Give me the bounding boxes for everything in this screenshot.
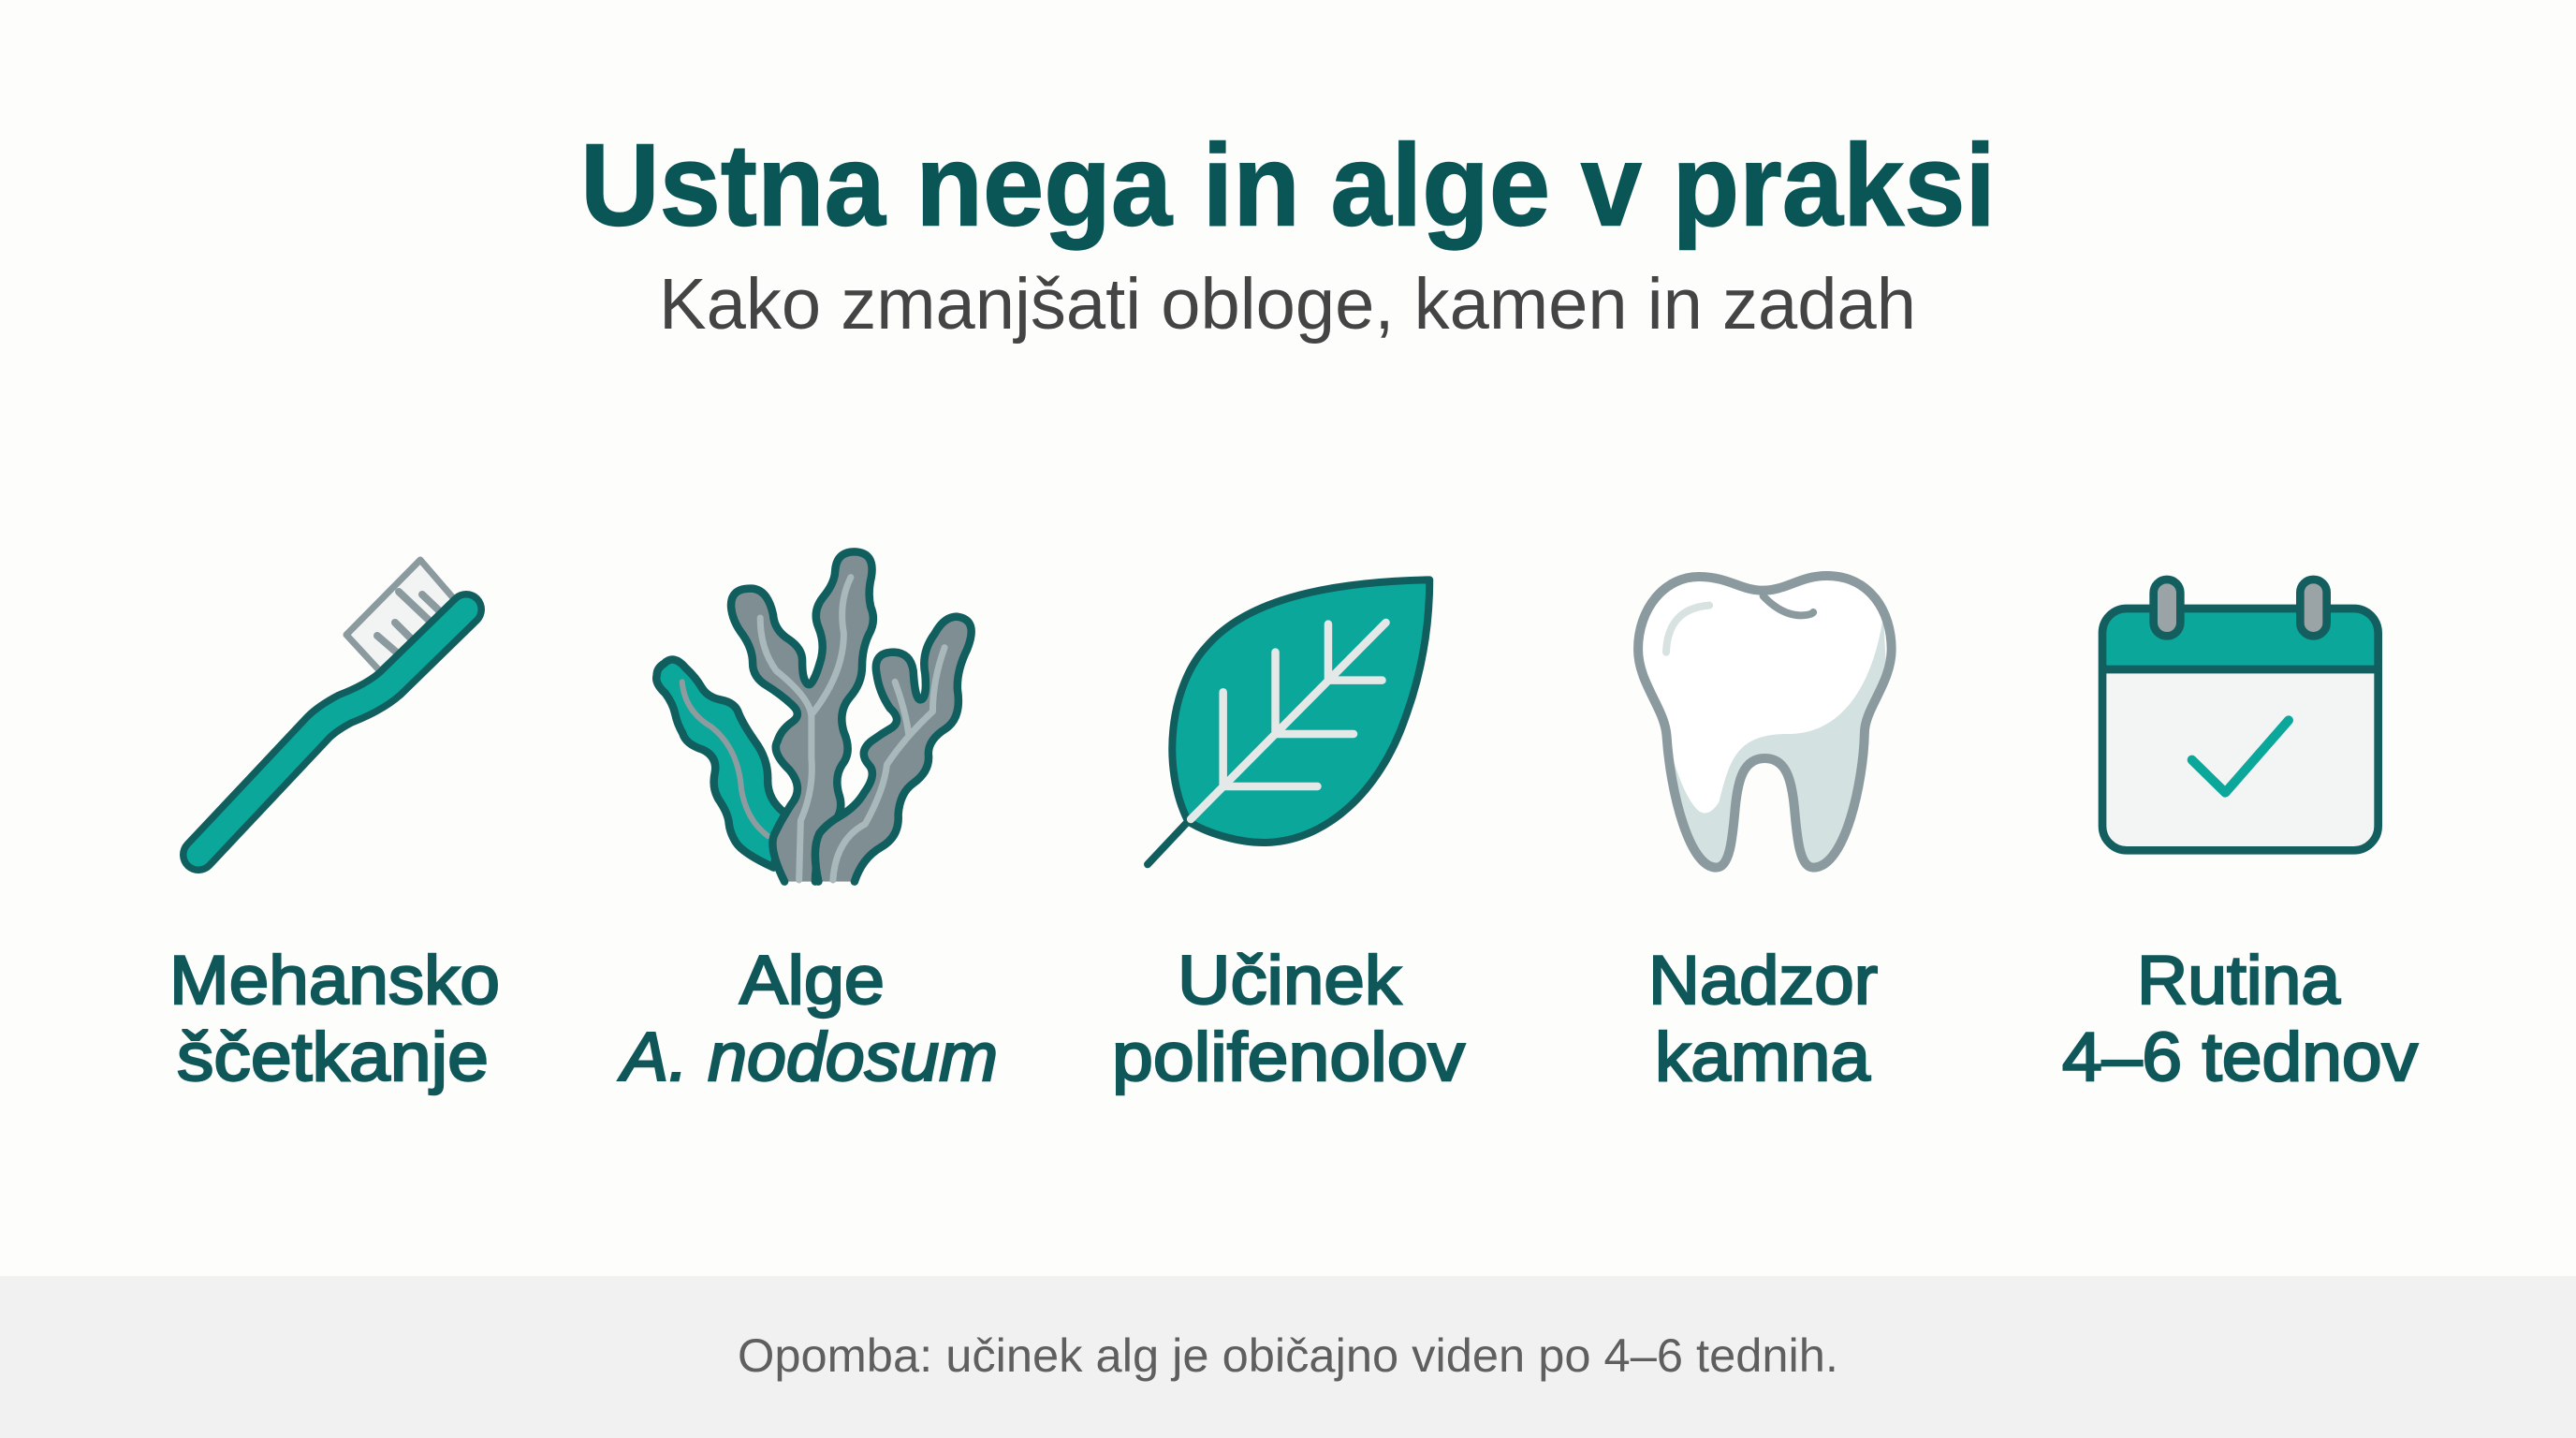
panel: algae [618, 551, 998, 1095]
label: polyphenol effect: Učinek [1178, 941, 1401, 1019]
label: algae: Alge [739, 941, 885, 1019]
label: mechanical brushing: ščetkanje [177, 1018, 489, 1095]
label: routine: Rutina [2137, 941, 2340, 1019]
label: algae: A. nodosum [618, 1018, 998, 1095]
label: routine [2062, 941, 2418, 1095]
footer band [0, 1276, 2576, 1438]
title: Ustna nega in alge v praksi [580, 122, 1996, 251]
footer note: Opomba: učinek alg je običajno viden po 4–6 tednih. [738, 1329, 1838, 1382]
label: mechanical brushing: Mehansko [169, 941, 500, 1019]
panel: mechanical brushing [169, 560, 500, 1095]
icon: leaf [1148, 580, 1429, 864]
icon: tooth [1638, 576, 1896, 871]
label: calculus control: kamna [1655, 1018, 1870, 1095]
panel: calculus control [1638, 576, 1896, 1095]
label: polyphenol effect: polifenolov [1112, 1018, 1465, 1095]
icon: calendar [2102, 580, 2378, 850]
label: calculus control: Nadzor [1648, 941, 1878, 1019]
panel: polyphenol effect [1112, 580, 1465, 1095]
label: polyphenol effect [1112, 941, 1465, 1095]
panel: routine [2062, 580, 2418, 1095]
icon: toothbrush [198, 560, 466, 855]
label: calculus control [1648, 941, 1878, 1095]
label: algae [618, 941, 998, 1095]
icon: seaweed [656, 551, 972, 882]
subtitle: Kako zmanjšati obloge, kamen in zadah [659, 264, 1916, 345]
label: mechanical brushing [169, 941, 500, 1095]
label: routine: 4–6 tednov [2062, 1018, 2418, 1095]
